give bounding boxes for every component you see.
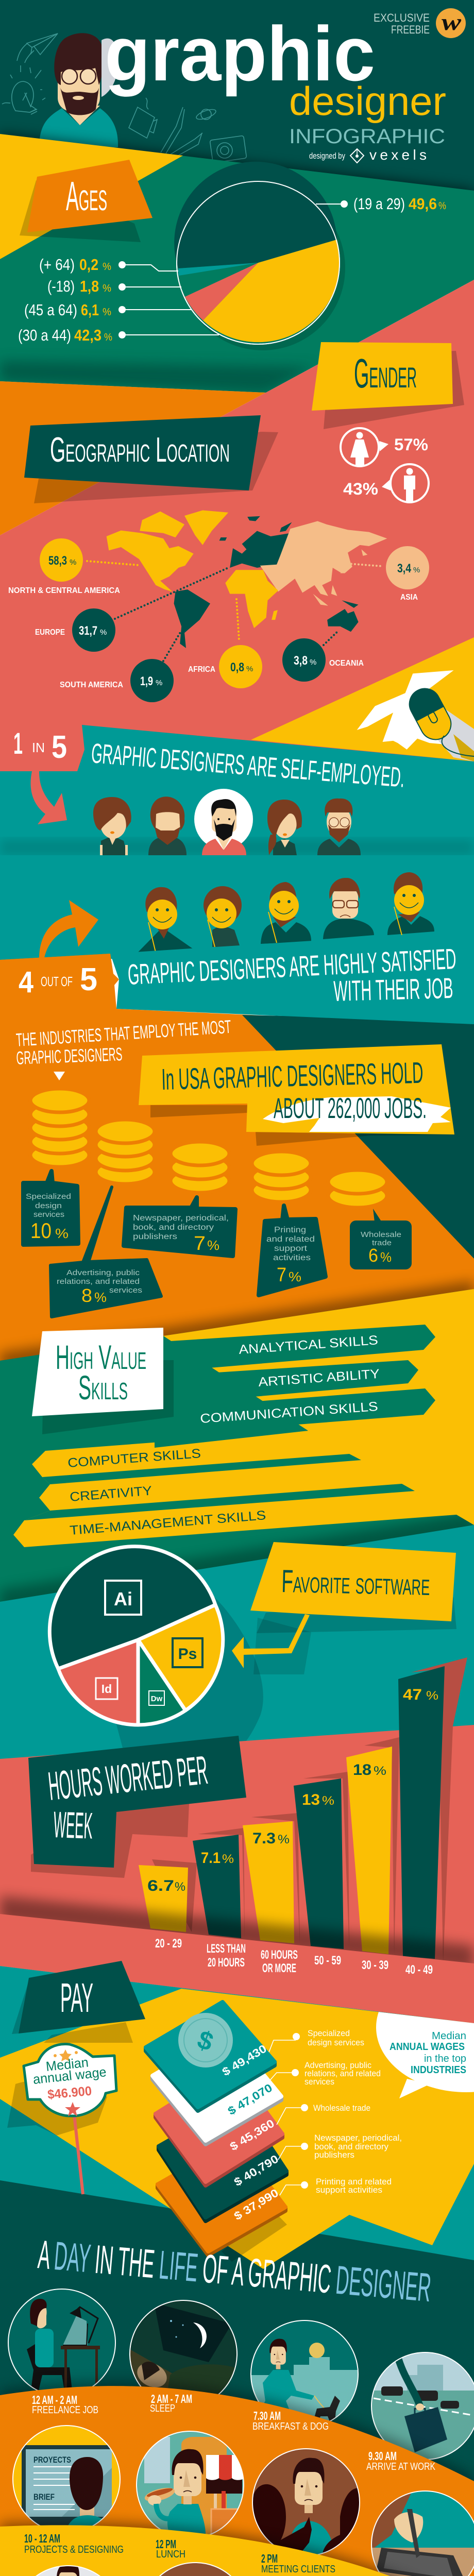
panel: self-employed (0, 725, 474, 969)
person: bearded man (148, 796, 187, 855)
plate: 47070 (153, 2031, 281, 2144)
callout: advertising: 8 (81, 1285, 92, 1306)
label: advertising: Advertising, public (304, 2060, 371, 2070)
callout: printing: % (289, 1269, 301, 1284)
ribbon: hours labels: 40 - 49 (405, 1963, 433, 1977)
map: continents (107, 510, 387, 648)
bar: 60 or more (243, 1821, 294, 1943)
ribbon: hours labels: 20 HOURS (208, 1956, 245, 1970)
icon: dreamweaver (149, 1691, 164, 1705)
background: yellow pay (0, 1989, 474, 2269)
scene: creative presentation (36, 2565, 100, 2576)
panel: header (0, 0, 474, 206)
panel: satisfied (39, 872, 434, 961)
title: graphic (105, 10, 375, 97)
callout: specialized design services: services (33, 1210, 64, 1219)
callout: south america: 1,9 (140, 674, 153, 688)
badge: exclusive freebie: w (442, 9, 461, 35)
heading: geographic location: Geographic Location (50, 430, 230, 469)
ribbon: hours labels (0, 1914, 474, 2023)
label: advertising (269, 2060, 381, 2087)
sign: median annual wage: Median (45, 2054, 89, 2074)
background: orange wedge (0, 381, 266, 535)
chart: hours bars (139, 1657, 467, 1963)
person: smiley three (261, 882, 311, 944)
callout: asia: 3,4 (397, 562, 412, 575)
bar: 40-49: % (426, 1689, 438, 1703)
bar: 30-39: 18 (353, 1761, 371, 1778)
ribbon: hours labels: 60 HOURS (261, 1948, 298, 1962)
label: advertising: relations, and related (304, 2069, 381, 2078)
label: 10-12am (24, 2532, 124, 2555)
heading: hours worked per week: WEEK (53, 1804, 93, 1847)
label: +64: 0,2 (79, 256, 98, 274)
bar: 50-59: 13 (302, 1791, 320, 1808)
label: +64: (+ 64) (39, 256, 75, 274)
plate: 45360: $ 45,360 (228, 2116, 277, 2153)
callout: advertising: % (94, 1290, 107, 1305)
callout: oceania (282, 631, 364, 682)
callout: advertising: services (109, 1286, 142, 1295)
label: newspaper: book, and directory (314, 2142, 388, 2151)
heading: ages: Ages (66, 173, 107, 219)
people row two (138, 872, 434, 952)
scene: designing (371, 2491, 474, 2576)
panel: hours background (0, 1725, 474, 2023)
bar: less than 20 (193, 1835, 241, 1938)
label: 7.30am: 7.30 AM (253, 2409, 281, 2422)
heading: pay (12, 1961, 145, 2043)
label: 2pm: 2 PM (261, 2552, 278, 2565)
bar: 20-29: % (175, 1880, 185, 1894)
bar: 30-39 (346, 1747, 392, 1954)
skill: creativity: CREATIVITY (69, 1483, 153, 1504)
value: 57 percent: 57% (394, 435, 428, 454)
label: 12pm (156, 2537, 185, 2560)
panel: ages background (0, 134, 474, 393)
callout: newspaper: % (207, 1238, 219, 1253)
chart: gender (341, 428, 429, 502)
ribbon: hours labels: 30 - 39 (362, 1958, 388, 1972)
panel: skills background (0, 1289, 474, 1618)
labels: yellow band times (24, 2532, 429, 2576)
panel: pay background (0, 1966, 474, 2277)
label: -18: (-18) (47, 277, 75, 295)
skill: computer: COMPUTER SKILLS (67, 1446, 201, 1470)
background: coral area (0, 280, 474, 783)
heading: high value skills: High Value (56, 1338, 146, 1376)
background: yellow skills (13, 1289, 474, 1547)
icon: indesign: Id (101, 1682, 112, 1696)
chart: software pie (49, 1547, 263, 1752)
callouts: industries (23, 1171, 412, 1317)
callout: printing: and related (266, 1235, 315, 1244)
callout: asia (348, 546, 429, 602)
person: glasses man (317, 799, 361, 855)
bubble: median annual wages: in the top (424, 2053, 466, 2064)
callout: africa (188, 599, 262, 688)
callout: north and central america: 58,3 (48, 554, 67, 568)
background: dark wedge (242, 1015, 474, 1259)
callout: newspaper: publishers (133, 1232, 177, 1241)
panel: industries background (0, 954, 474, 1381)
plate: 49430: $ 49,430 (220, 2042, 269, 2078)
label: wholesale (277, 2103, 370, 2125)
callout: advertising (50, 1187, 161, 1317)
icon: doodles (2, 33, 247, 163)
scene: sleep (129, 2300, 238, 2395)
label: specialized (269, 2028, 364, 2052)
heading: industries: THE INDUSTRIES THAT EMPLOY THE MOST (15, 1016, 232, 1050)
vexels credit (309, 147, 427, 163)
bubble: median annual wages: Median (432, 2030, 466, 2042)
sign: median annual wage: annual wage (32, 2064, 107, 2087)
callout: europe: EUROPE (35, 628, 65, 637)
label: printing: support activities (316, 2185, 382, 2195)
callout: africa: % (246, 665, 253, 673)
text: HOURS WORKED PER (46, 1747, 210, 1809)
panel: yellow day band (0, 2525, 474, 2576)
title: designer (289, 78, 446, 124)
icon: indesign (96, 1678, 117, 1699)
label: 30 a 44 (18, 326, 219, 344)
chart: wage plates (146, 2002, 287, 2262)
heading: high value skills: Skills (78, 1368, 128, 1406)
callout: specialized design services: 10 (30, 1218, 52, 1243)
ribbon: 1 in 5 (0, 725, 84, 771)
icon: female (341, 428, 388, 466)
background: yellow wedge (0, 134, 183, 259)
scene: meeting clients (251, 2449, 361, 2561)
bar: 40-49: 47 (403, 1686, 422, 1703)
label: 10-12am: PROJECTS & DESIGNING (24, 2544, 124, 2555)
label: 12am-2am (32, 2393, 98, 2416)
callout: europe: 31,7 (79, 624, 97, 638)
label: 7.30am (252, 2409, 329, 2432)
arrow: orange (39, 900, 98, 961)
label: advertising: services (304, 2077, 334, 2087)
callout: specialized design services (23, 1171, 78, 1245)
title: INFOGRAPHIC (289, 125, 445, 148)
icon: photoshop: Ps (178, 1646, 197, 1663)
callout: printing (259, 1206, 326, 1295)
plate: 37990 (158, 2140, 285, 2255)
skills: lower ribbons text (67, 1446, 266, 1538)
label: 12pm: 12 PM (156, 2537, 176, 2551)
person: smiley one (138, 887, 193, 952)
label: 30 a 44: % (104, 332, 112, 343)
badge: exclusive freebie: FREEBIE (391, 23, 430, 36)
callout: wholesale (350, 1209, 412, 1269)
callout: specialized design services: design (35, 1201, 62, 1210)
panel: software background (0, 1525, 474, 1767)
label: 45 a 64: 6,1 (81, 301, 99, 319)
people row one (93, 789, 361, 855)
person: woman two (267, 800, 302, 855)
callout: south america: SOUTH AMERICA (60, 681, 123, 689)
label: 9.30am: 9.30 AM (368, 2449, 397, 2463)
callout: wholesale: trade (372, 1239, 392, 1247)
scene: projects and designing: PROYECTS (33, 2455, 71, 2465)
label: -18: 1,8 (80, 277, 99, 295)
ribbon: hours labels: 20 - 29 (155, 1937, 182, 1951)
heading: hours worked per week (28, 1736, 246, 1878)
callout: wholesale: 6 (368, 1245, 378, 1266)
bar: 20-29 (139, 1865, 188, 1932)
plate: 37990: $ 37,990 (232, 2186, 281, 2223)
badge: exclusive freebie (374, 8, 466, 38)
panel: orange day band (0, 2386, 474, 2576)
label: newspaper: publishers (314, 2150, 354, 2160)
label: specialized: design services (308, 2038, 364, 2047)
vexels credit: vexels (369, 147, 427, 163)
callout: africa: AFRICA (188, 665, 215, 674)
background: yellow wedge with mouse (251, 637, 474, 761)
stack: specialized (30, 1089, 89, 1167)
title (101, 10, 446, 148)
callout: newspaper: 7 (194, 1233, 206, 1255)
labels: wage industries (269, 2028, 402, 2195)
teal band (0, 725, 474, 969)
callout: advertising: relations, and related (57, 1277, 140, 1286)
scene: arrive at work (371, 2352, 474, 2463)
ribbon: hours labels: LESS THAN (207, 1942, 246, 1956)
brush stroke (263, 1096, 451, 1132)
callout: north and central america (8, 538, 139, 595)
panel: day dark background (0, 2180, 474, 2494)
bar: 30-39: % (374, 1764, 386, 1778)
callout: usa jobs (139, 1044, 454, 1146)
arrow: coral (30, 771, 67, 824)
icon: designer portrait (39, 33, 118, 147)
callout: wholesale: Wholesale (361, 1230, 401, 1239)
badge: exclusive freebie: EXCLUSIVE (374, 11, 430, 24)
bubble: median annual wages: ANNUAL WAGES (390, 2041, 465, 2053)
heading: gender (312, 342, 464, 429)
chart: world map (8, 510, 429, 702)
callout: printing: 7 (277, 1264, 286, 1286)
label: 2am-7am: SLEEP (150, 2403, 175, 2414)
plate: 49430: $ (194, 2025, 217, 2057)
label: 2am-7am: 2 AM - 7 AM (151, 2392, 192, 2405)
ribbon: 4 out of 5: 4 (19, 965, 33, 999)
callout: europe: % (100, 628, 107, 637)
bar: 50-59 (294, 1778, 344, 1949)
icon: illustrator: Ai (114, 1588, 132, 1609)
vexels credit: designed by (309, 151, 345, 161)
icon: dreamweaver: Dw (151, 1694, 163, 1703)
bar: 50-59: % (322, 1794, 334, 1808)
sign: median annual wage: $46.900 (47, 2084, 92, 2102)
callout: wholesale: % (380, 1249, 392, 1265)
label: wholesale: Wholesale trade (313, 2103, 370, 2113)
label: 2pm (261, 2552, 335, 2575)
label: +64: % (103, 261, 111, 273)
person: unhappy (323, 878, 374, 939)
scene: breakfast and dog (251, 2320, 358, 2432)
label: printing (280, 2177, 392, 2195)
plate: 47070: $ 47,070 (226, 2081, 275, 2117)
plate: 49430 (146, 2002, 275, 2111)
heading: high value skills (32, 1328, 174, 1434)
label: specialized: Specialized (308, 2028, 350, 2038)
scene: projects and designing: BRIEF (33, 2492, 55, 2502)
icon: illustrator (105, 1581, 141, 1615)
callout: asia: ASIA (400, 593, 418, 602)
stack: wholesale (328, 1170, 387, 1208)
label: 2pm: MEETING CLIENTS (261, 2564, 335, 2575)
label: newspaper: Newspaper, periodical, (314, 2133, 402, 2143)
person: woman one (93, 797, 131, 855)
label: 19 a 29: % (438, 200, 446, 212)
icon: hand holding mouse (357, 670, 474, 761)
callout: oceania: OCEANIA (329, 659, 364, 668)
ribbon: 4 out of 5 (0, 954, 119, 1009)
heading: industries: GRAPHIC DESIGNERS (16, 1043, 123, 1069)
callout: newspaper: Newspaper, periodical, (133, 1214, 229, 1223)
callout: north and central america: % (70, 558, 76, 567)
label: 19 a 29 (316, 195, 446, 213)
bar: 20-29: 6.7 (147, 1877, 174, 1894)
plate: 40790: $ 40,790 (232, 2152, 281, 2189)
value: 43 percent: 43% (343, 480, 378, 498)
callout: printing: Printing (274, 1226, 306, 1234)
bar: less than 20: 7.1 (201, 1850, 221, 1867)
callout: south america: % (156, 679, 162, 687)
label: 10-12am: 10 - 12 AM (24, 2532, 60, 2545)
ribbon: hours labels: 50 - 59 (314, 1954, 341, 1968)
bar: less than 20: % (222, 1852, 234, 1866)
callout: printing: activities (273, 1253, 311, 1262)
bar shadows (152, 1657, 467, 1963)
icon: photoshop (173, 1638, 202, 1667)
plate: 40790 (159, 2100, 286, 2221)
callout: specialized design services: % (55, 1226, 69, 1241)
heading: geographic location (24, 415, 278, 503)
chart: ages pie (18, 162, 446, 350)
stack: newspaper (171, 1142, 229, 1193)
stack: printing (252, 1151, 311, 1202)
bubble: median annual wages (376, 2012, 474, 2098)
plate: 45360 (156, 2066, 282, 2185)
skill: time management: TIME-MANAGEMENT SKILLS (69, 1508, 266, 1538)
label: 45 a 64: % (103, 307, 111, 318)
heading: ages (20, 160, 153, 242)
skill: artistic: ARTISTIC ABILITY (258, 1367, 380, 1389)
callout: specialized design services: Specialized (26, 1192, 71, 1201)
callout: europe (35, 568, 228, 652)
bar: 60 or more: 7.3 (252, 1830, 276, 1847)
scene: lunch (136, 2431, 244, 2535)
ribbon: 1 in 5: 1 (13, 727, 23, 760)
callout: advertising: Advertising, public (66, 1268, 140, 1277)
label: 9.30am (366, 2449, 436, 2472)
callout: newspaper (124, 1197, 235, 1256)
scene: freelance job (8, 2289, 115, 2396)
callout: asia: % (413, 566, 420, 574)
label: printing: Printing and related (316, 2177, 392, 2187)
label: 30 a 44: 42,3 (74, 326, 101, 344)
label: 2am-7am (150, 2392, 192, 2414)
callout: south america (60, 631, 181, 702)
label: +64 (39, 256, 178, 274)
label: 7.30am: BREAKFAST & DOG (252, 2421, 329, 2432)
scene: corrections on design (159, 2562, 232, 2576)
label: -18: % (103, 283, 111, 294)
label: 19 a 29: 49,6 (409, 195, 437, 213)
heading: industries (15, 1016, 232, 1080)
ribbon: 1 in 5: IN (32, 740, 45, 755)
ribbon: hours labels: OR MORE (262, 1961, 296, 1975)
icon: male (382, 464, 429, 502)
label: -18 (47, 277, 181, 295)
ribbons: top skills (155, 1325, 435, 1448)
person: highlighted man (194, 789, 253, 855)
callout: oceania: 3,8 (294, 654, 308, 668)
person: smiley four (387, 872, 434, 935)
label: 9.30am: ARRIVE AT WORK (366, 2461, 436, 2472)
chart: coin stacks (30, 1089, 387, 1208)
bubble: median annual wages: INDUSTRIES (411, 2064, 466, 2076)
person: smiley two (204, 886, 242, 947)
label: 12am-2am: 12 AM - 2 AM (32, 2393, 77, 2406)
skill: communication: COMMUNICATION SKILLS (199, 1399, 379, 1426)
ribbon: 4 out of 5: OUT OF (41, 974, 73, 989)
label: 45 a 64 (24, 301, 192, 319)
ribbon: satisfied heading (0, 930, 474, 1024)
scene: projects and designing (13, 2426, 120, 2537)
callout: oceania: % (310, 658, 316, 667)
ribbon: 4 out of 5: 5 (80, 962, 97, 997)
callout: favorite software (232, 1542, 456, 1674)
label: newspaper (278, 2133, 402, 2160)
ribbon: 1 in 5: 5 (52, 730, 67, 765)
callout: printing: support (274, 1244, 308, 1253)
sign: median annual wage (7, 2044, 116, 2194)
bar: 40-49 (398, 1666, 445, 1959)
callout: newspaper: book, and directory (133, 1223, 214, 1232)
callout: north and central america: NORTH & CENTRAL AMERICA (8, 586, 120, 595)
skill: analytical: ANALYTICAL SKILLS (238, 1333, 379, 1357)
labels: orange band times (32, 2392, 436, 2472)
stack: advertising (96, 1120, 155, 1184)
bar: 60 or more: % (278, 1833, 290, 1846)
label: 30 a 44: (30 a 44) (18, 326, 71, 344)
label: 45 a 64: (45 a 64) (24, 301, 77, 319)
heading: pay: PAY (60, 1975, 93, 2021)
callout: africa: 0,8 (230, 660, 244, 674)
label: 12pm: LUNCH (156, 2549, 185, 2560)
label: 19 a 29: (19 a 29) (353, 195, 405, 213)
label: 12am-2am: FREELANCE JOB (32, 2404, 98, 2416)
